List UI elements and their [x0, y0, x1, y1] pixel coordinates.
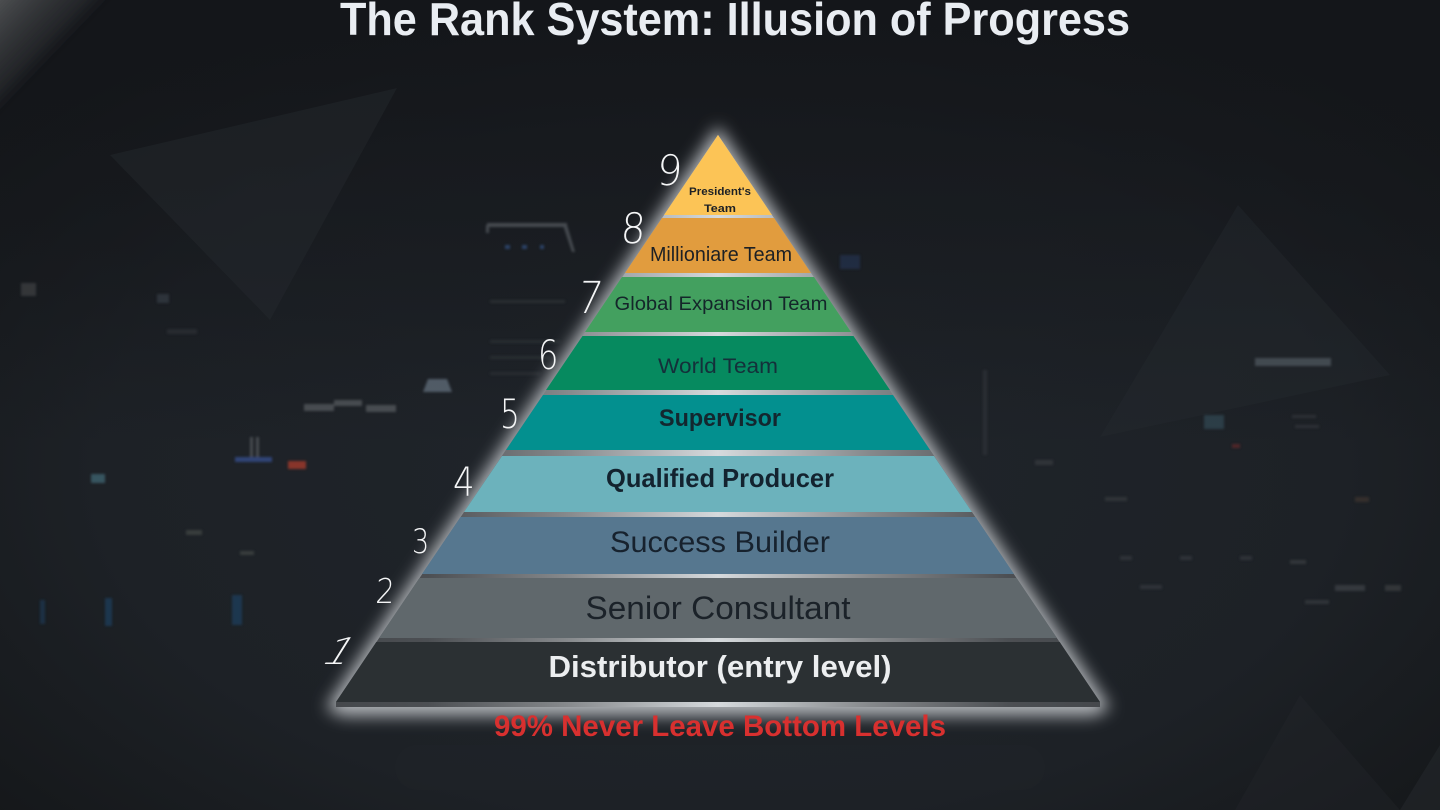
rank numbers: 6: [538, 331, 558, 379]
rank numbers: 7: [574, 272, 606, 324]
tier 1: Distributor (entry level): [336, 642, 1100, 702]
rank numbers: 3: [412, 522, 429, 562]
tier 1: Distributor (entry level): Distributor (entry level): [548, 649, 892, 684]
rank numbers: 9: [655, 146, 684, 195]
tier 9: President's Team: Team: [704, 203, 736, 215]
tier 4: Qualified Producer: [464, 456, 972, 512]
pyramid glow: [326, 126, 1110, 716]
tier 5: Supervisor: [506, 395, 930, 450]
tier 4: Qualified Producer: Qualified Producer: [606, 463, 834, 493]
tier 3: Success Builder: [422, 517, 1014, 574]
tier 7: Global Expansion Team: Global Expansion Team: [614, 294, 828, 315]
rank numbers: 2: [374, 571, 396, 612]
tier 7: Global Expansion Team: [585, 277, 851, 332]
tier 3: Success Builder: Success Builder: [610, 526, 830, 559]
callout: 99% never leave bottom levels: 99% Never Leave Bottom Levels: [494, 710, 946, 743]
tier 9: President's Team: President's: [689, 186, 751, 198]
tier 2: Senior Consultant: [379, 578, 1057, 638]
rank numbers: 8: [619, 204, 647, 253]
rank numbers: 4: [453, 459, 475, 506]
rank numbers: 1: [312, 631, 367, 673]
pyramid: [336, 135, 1100, 707]
tier 6: World Team: World Team: [658, 355, 778, 378]
tier 8: Millioniare Team: [625, 218, 811, 273]
tier 2: Senior Consultant: Senior Consultant: [586, 590, 851, 626]
tier 5: Supervisor: Supervisor: [659, 405, 781, 432]
tier 9: President's Team: [664, 135, 772, 215]
rank numbers: [312, 146, 684, 673]
tier 8: Millioniare Team: Millioniare Team: [650, 244, 792, 266]
tier 6: World Team: [546, 336, 890, 390]
rank numbers: 5: [500, 392, 520, 438]
silver separators: [336, 135, 1100, 707]
